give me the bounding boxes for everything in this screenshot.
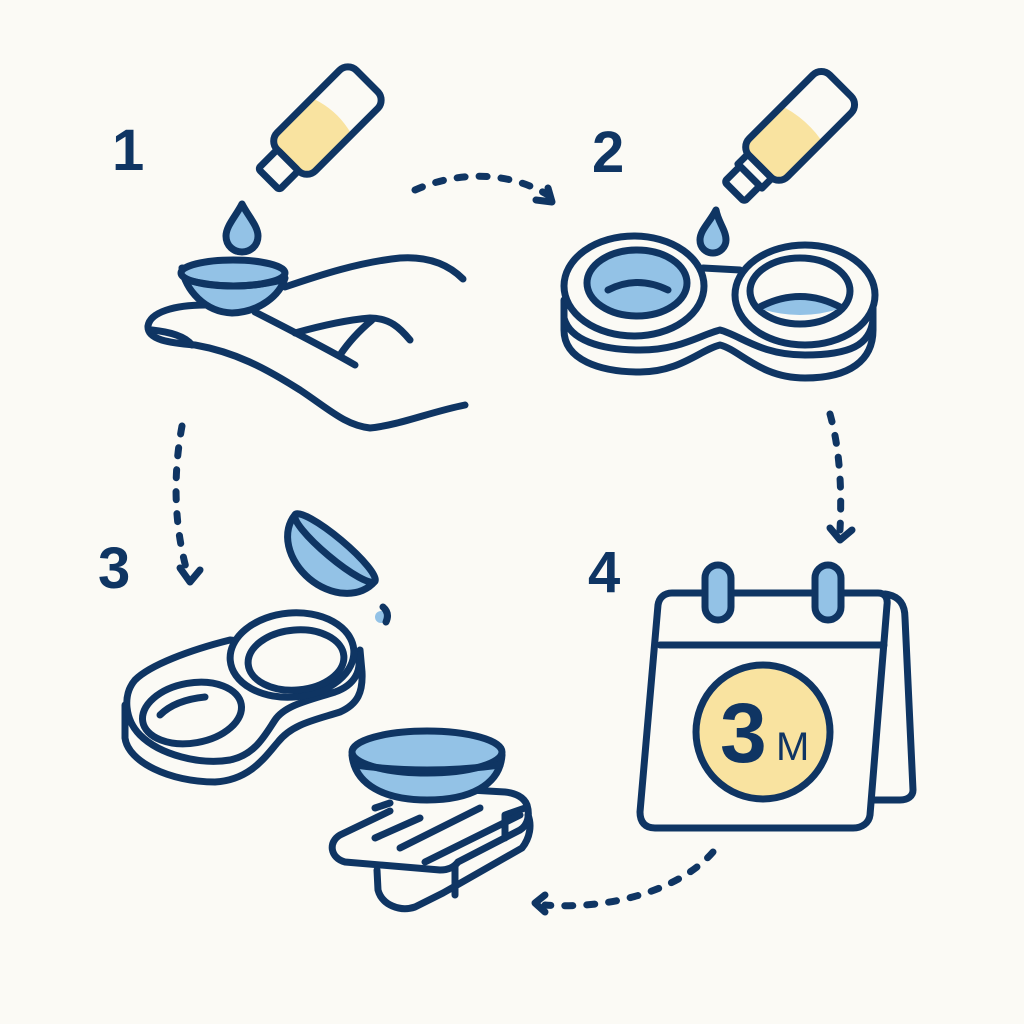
arrow 4 to 3 [545, 852, 713, 906]
step number 4: 4 [588, 540, 620, 605]
lens case with solution [564, 236, 875, 378]
3M badge [696, 665, 830, 799]
small drop [375, 611, 387, 623]
3M badge: 3 [720, 686, 767, 780]
bottle 2 [715, 66, 860, 211]
drop 1 [226, 204, 258, 252]
arrow 2 to 4 [830, 414, 841, 530]
drop 2 [700, 210, 726, 253]
step 2: bottle filling lens case [564, 66, 875, 378]
bottle 1 [250, 62, 386, 198]
calendar front page [640, 593, 887, 828]
step 1: bottle dropping solution on lens in hand [148, 62, 465, 428]
step 3: empty case, lens removed, lens on pad [125, 507, 530, 909]
hand [285, 258, 463, 287]
empty lens case [125, 608, 362, 782]
3M badge: M [776, 725, 809, 769]
falling lens [269, 507, 381, 612]
lens on finger [182, 268, 285, 313]
arrow 1 to 3 [176, 426, 188, 575]
step number 1: 1 [112, 118, 144, 183]
step number 3: 3 [98, 536, 130, 601]
step number 2: 2 [592, 120, 624, 185]
arrow 1 to 2 [415, 176, 548, 195]
step 4: calendar 3 months [640, 565, 913, 828]
calendar rings [705, 565, 731, 620]
calendar back page [872, 594, 913, 800]
lens on storage pad [332, 731, 530, 909]
